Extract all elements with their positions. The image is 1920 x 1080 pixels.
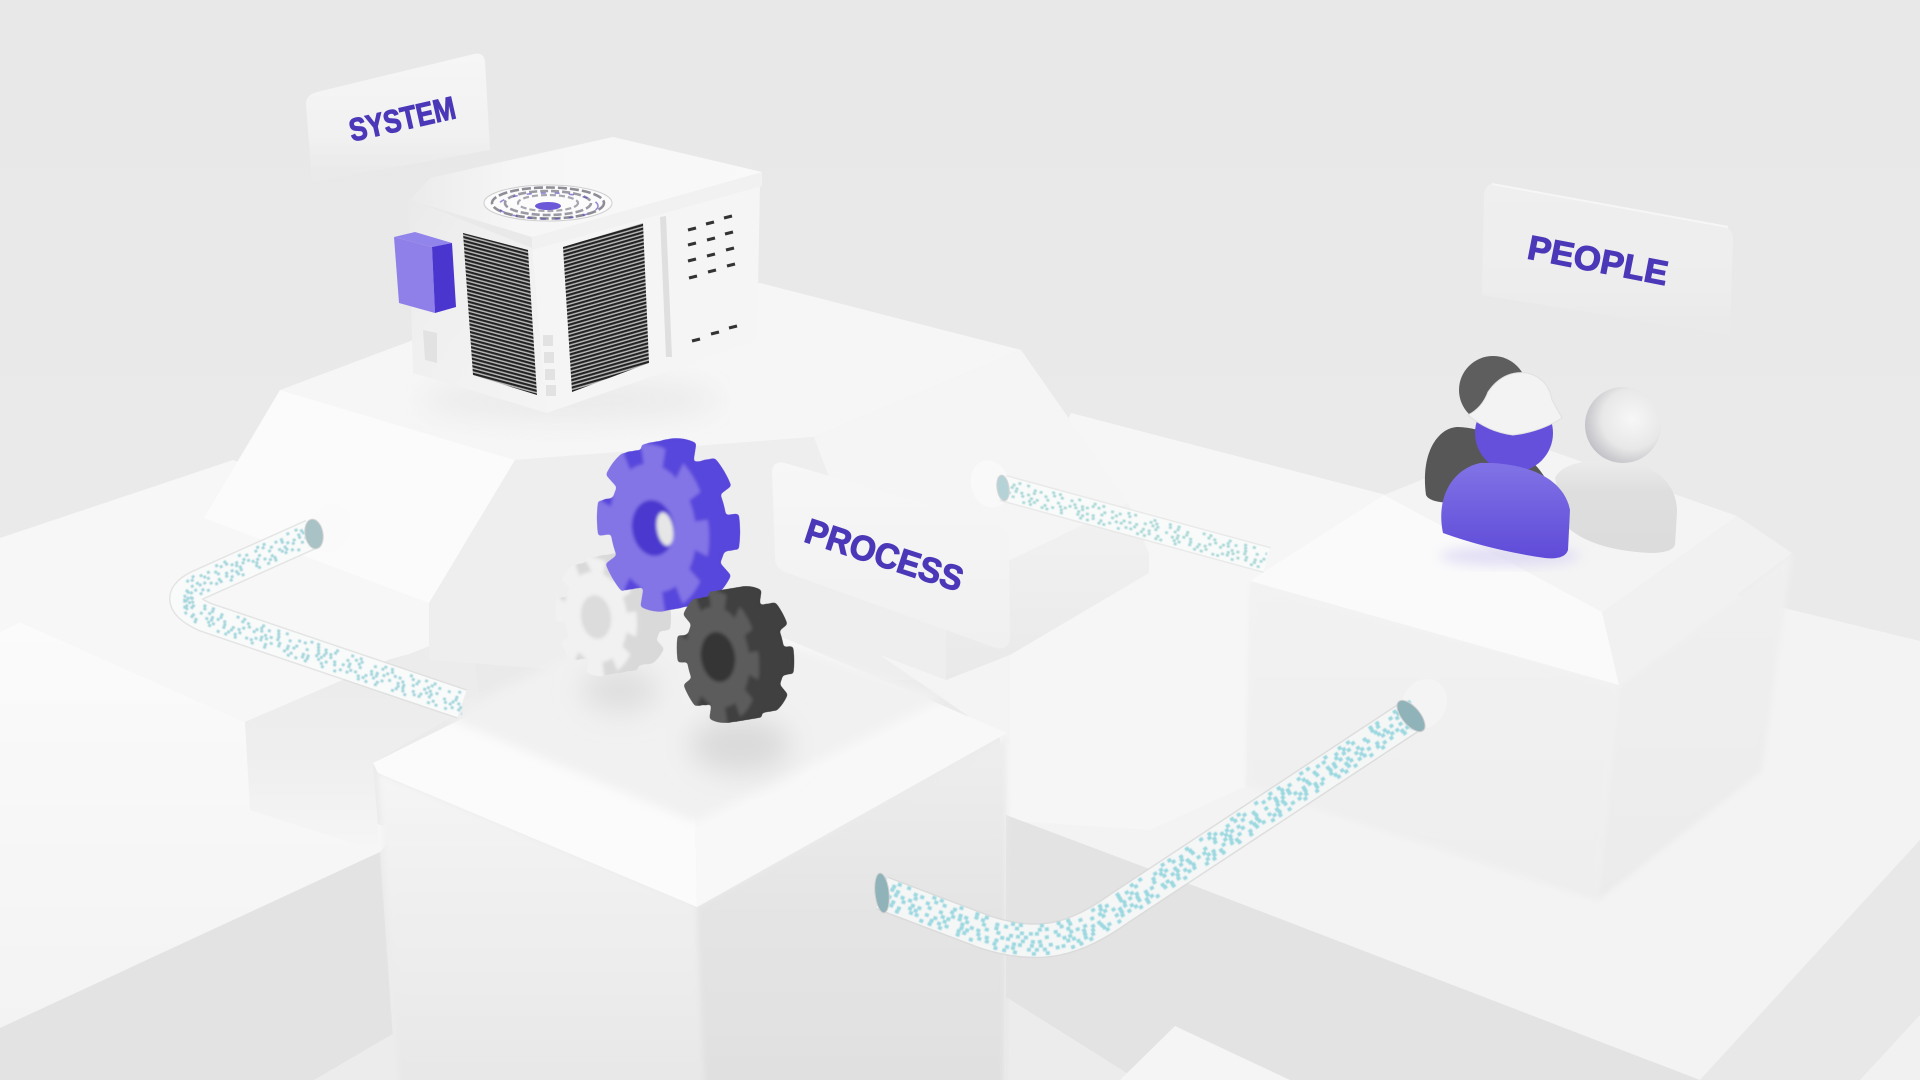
purple gear face [596, 450, 710, 606]
upper middle plane behind the system pedestal [1000, 413, 1390, 830]
central block: left face [378, 773, 704, 1080]
purple person head [1475, 394, 1553, 472]
unit top [410, 137, 762, 248]
system pedestal: top surface [280, 283, 1021, 460]
bottom small block [1120, 1026, 1290, 1080]
central block: top surface [446, 606, 945, 822]
people pedestal: front left face [1246, 581, 1619, 901]
gear shadow on central block [582, 668, 790, 773]
pipe 3 socket [1392, 670, 1456, 738]
lower gray floor under the central plane [1006, 815, 1700, 1080]
white gear face [554, 562, 638, 672]
pipe 2 socket [965, 456, 1015, 512]
lower right face of the wide plane [1700, 840, 1920, 1080]
unit right face [532, 185, 760, 413]
system pedestal: left chamfer [204, 390, 515, 603]
label card: PEOPLE [1482, 184, 1733, 335]
small square indicators [543, 335, 556, 396]
panel groove [660, 216, 672, 357]
plane beside the process step [880, 655, 1010, 745]
system pedestal: right chamfer lit [814, 350, 1128, 560]
people pedestal: right face [1597, 553, 1792, 901]
system pedestal: front face [429, 437, 1010, 680]
unit left face [408, 198, 547, 413]
recessed panel [423, 330, 437, 363]
lower left gray floor [0, 852, 396, 1080]
label text: SYSTEM: SYSTEM [346, 90, 459, 148]
far right floor plane [1000, 480, 1920, 1080]
people group [1425, 356, 1677, 566]
right grille [563, 223, 649, 392]
lower left front face [0, 622, 400, 1028]
unit shadow [420, 378, 720, 422]
air conditioning unit [394, 137, 762, 422]
bottom right corner highlight [1860, 1015, 1920, 1080]
fan grille [484, 185, 612, 221]
pipe 3: lower glass tube with particles [873, 696, 1430, 954]
lighter floor strip bottom [1006, 997, 1135, 1080]
purple person body [1441, 463, 1570, 558]
people pedestal: left chamfer [1250, 495, 1619, 685]
dark person body [1425, 427, 1550, 510]
light person head [1585, 387, 1661, 463]
shadow face next to lower left block [245, 630, 480, 852]
purple gear hole [628, 497, 678, 559]
light person body [1555, 460, 1677, 553]
gear: dark gray [676, 591, 795, 718]
purple gear hole opening [654, 511, 676, 547]
dark gear hole [698, 630, 738, 684]
gear: white [554, 556, 672, 672]
pipe 1 socket [303, 498, 357, 558]
dark person head [1459, 356, 1527, 424]
gear: purple [596, 444, 741, 606]
unit roof rim [532, 172, 762, 250]
step under the process card [946, 503, 1149, 680]
central block: right chamfer [660, 600, 1007, 907]
label text: PROCESS: PROCESS [800, 512, 968, 599]
purple person floor glow [1440, 546, 1580, 566]
pipe 1: left glass tube with particles [185, 518, 462, 714]
pipe 3 openings [873, 872, 891, 914]
pipe 1 opening [303, 518, 325, 550]
people pedestal: right chamfer [1602, 516, 1792, 685]
vent slots [688, 216, 737, 341]
purple box front [394, 237, 435, 313]
hard hat [1468, 373, 1562, 435]
label card: PROCESS [772, 462, 1010, 648]
central block: right face [697, 737, 1007, 1080]
central block: left chamfer [373, 650, 697, 907]
label text: PEOPLE: PEOPLE [1524, 229, 1671, 293]
white gear hole [578, 593, 614, 641]
lower left plane: system base [0, 460, 600, 722]
pipe 2 opening [995, 474, 1011, 502]
pipe 2: upper glass tube with particles [995, 474, 1267, 569]
bottom left light corner [314, 1032, 400, 1080]
label card: SYSTEM [306, 54, 490, 182]
dark gear face [676, 596, 760, 718]
fan hub [535, 202, 561, 210]
people pedestal: top surface [1384, 440, 1737, 612]
purple box top [394, 232, 452, 247]
purple box side [432, 243, 456, 313]
left grille [463, 233, 537, 395]
